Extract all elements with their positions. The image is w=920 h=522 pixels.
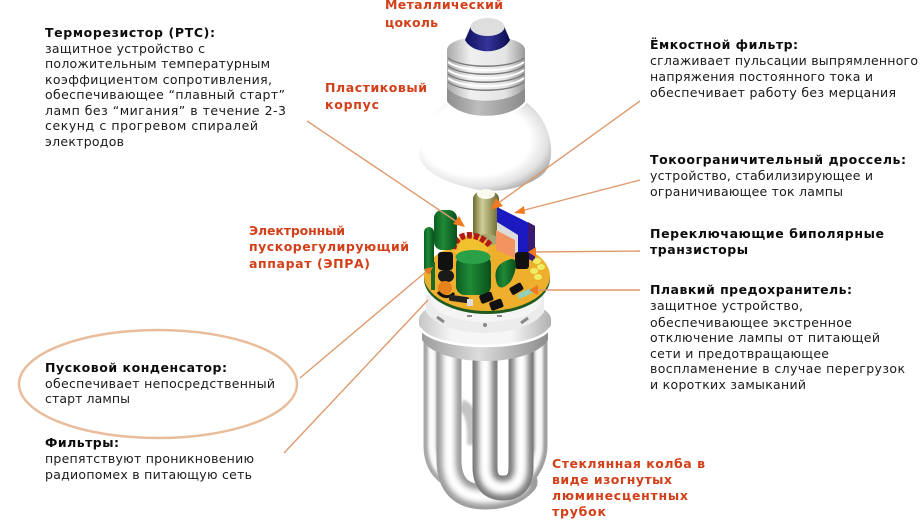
label: electronic ballast: пускорегулирующий [249, 239, 409, 254]
label: electronic ballast: Электронный [249, 223, 345, 238]
label: metal base [385, 0, 503, 30]
text: choke: устройство, стабилизирующее и [650, 168, 873, 183]
text: filters: радиопомех в питающую сеть [45, 467, 252, 482]
highlight ellipse [19, 330, 297, 438]
glass tubes [432, 340, 539, 497]
text: thermistor: положительным температурным [45, 56, 270, 71]
text: fuse: защитное устройство, [650, 298, 803, 313]
coil [453, 235, 489, 259]
text: filters: препятствуют проникновению [45, 451, 254, 466]
text: starting capacitor: Пусковой конденсатор: [45, 360, 227, 375]
callout lines and arrows [284, 101, 640, 453]
text: filters [45, 435, 254, 482]
text: choke: ограничивающее ток лампы [650, 184, 843, 199]
label: plastic housing: Пластиковый [325, 80, 427, 95]
circuit board [424, 244, 550, 314]
label: plastic housing [325, 80, 427, 112]
label: glass tube: трубок [552, 504, 607, 519]
label: glass tube: Стеклянная колба в [552, 456, 705, 471]
transformer [497, 207, 535, 262]
text: capacitive filter [650, 37, 918, 100]
text: thermistor: электродов [45, 134, 124, 149]
plastic collar [422, 330, 548, 361]
text: thermistor: обеспечивающее “плавный старт” [45, 87, 285, 102]
bulb: lamp illustration [419, 18, 551, 497]
text: fuse: и коротких замыканий [650, 377, 806, 392]
green components [434, 210, 457, 250]
text: starting capacitor: обеспечивает непосредственный [45, 376, 275, 391]
plastic housing dome [419, 103, 551, 191]
text: filters: Фильтры: [45, 435, 119, 450]
rear tube seen through the gap [461, 405, 473, 445]
text: fuse: воспламенение в случае перегрузок [650, 361, 905, 376]
label: electronic ballast [249, 223, 409, 271]
text: capacitive filter: обеспечивает работу без мерцания [650, 85, 896, 100]
black transistors [438, 252, 453, 270]
text: choke: Токоограничительный дроссель: [650, 152, 906, 167]
text: fuse: отключение лампы от питающей [650, 330, 880, 345]
text: capacitive filter: сглаживает пульсации выпрямленного [650, 53, 918, 68]
text: thermistor [45, 25, 286, 149]
text: choke [650, 152, 906, 199]
text: capacitive filter: напряжения постоянного тока и [650, 69, 873, 84]
text: transistors: Переключающие биполярные [650, 226, 884, 241]
metal screw base [447, 85, 525, 116]
label: glass tube [552, 456, 705, 519]
text: capacitive filter: Ёмкостной фильтр: [650, 37, 798, 52]
text: fuse: обеспечивающее экстренное [650, 315, 852, 330]
text: thermistor: защитное устройство с [45, 41, 205, 56]
label: plastic housing: корпус [325, 97, 379, 112]
label: glass tube: виде изогнутых [552, 472, 672, 487]
text: fuse: Плавкий предохранитель: [650, 282, 852, 297]
label: metal base: цоколь [385, 15, 438, 30]
text: thermistor: ламп без “мигания” в течение 2-3 [45, 103, 286, 118]
text: starting capacitor: старт лампы [45, 391, 130, 406]
text: thermistor: Терморезистор (PTC): [45, 25, 215, 40]
text: transistors: транзисторы [650, 242, 748, 257]
label: glass tube: люминесцентных [552, 488, 688, 503]
text: thermistor: коэффициентом сопротивления, [45, 72, 272, 87]
text: transistors [650, 226, 884, 257]
text: fuse: сети и предотвращающее [650, 346, 829, 361]
diodes and resistors [449, 295, 469, 303]
capacitor tip under the dome [473, 192, 499, 208]
text: fuse [650, 282, 905, 392]
text: thermistor: секунд с прогревом спиралей [45, 118, 258, 133]
capacitor: top [473, 192, 499, 242]
label: electronic ballast: аппарат (ЭПРА) [249, 256, 370, 271]
text: starting capacitor [45, 360, 275, 406]
